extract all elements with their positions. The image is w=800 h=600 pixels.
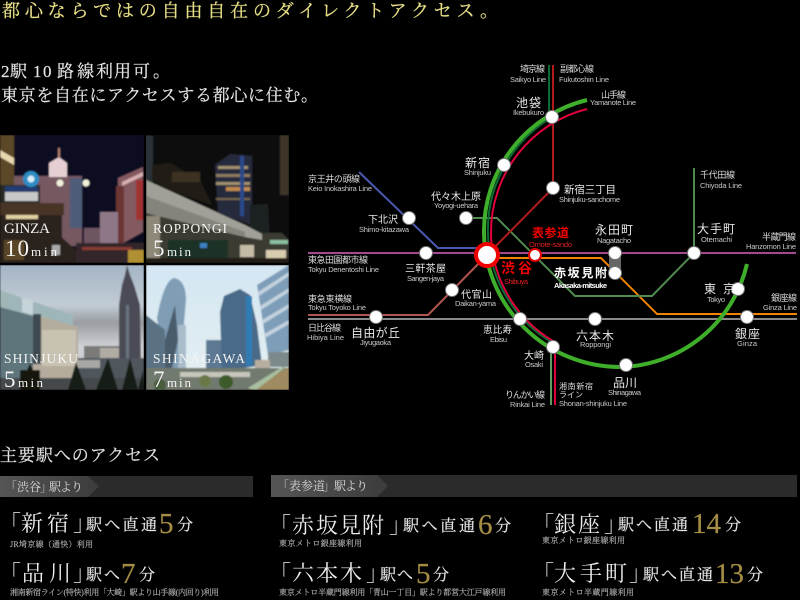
access item: Otemachi bbox=[532, 558, 763, 597]
line: Rinkai lower section bbox=[550, 347, 552, 405]
photo: Shinagawa: min bbox=[167, 375, 192, 390]
label: Sangen-jaya: 三軒茶屋 bbox=[405, 262, 446, 275]
access item: Shinjuku: 「新宿」 bbox=[0, 511, 95, 536]
station: Omote-sando bbox=[529, 249, 541, 261]
label: Ginza Line: 銀座線 bbox=[771, 292, 797, 303]
line: Saikyo bbox=[488, 65, 553, 405]
label: Shonan-shinjuku Line: Shonan-shinjuku Line bbox=[559, 399, 627, 408]
label: Shinjuku: 新宿 bbox=[465, 156, 490, 170]
label: Shinjuku-sanchome: Shinjuku-sanchome bbox=[559, 195, 620, 204]
label: Toyoko Line: Tokyu Toyoko Line bbox=[308, 303, 366, 312]
panel: station photos bbox=[0, 135, 289, 392]
label: Keio Inokashira Line: Keio Inokashira Line bbox=[308, 184, 372, 193]
label: Daikan-yama bbox=[455, 288, 497, 308]
photo: Shinjuku bbox=[0, 265, 144, 392]
map lines bbox=[308, 65, 797, 405]
label: Jiyugaoka bbox=[351, 325, 400, 347]
line: Fukutoshin bbox=[487, 65, 553, 255]
label: Daikan-yama: Daikan-yama bbox=[455, 299, 497, 308]
panel: access from Omote-sando bbox=[269, 475, 797, 597]
access item: Ginza: 「銀座」 bbox=[532, 512, 626, 537]
access item: Shinagawa: 7 bbox=[121, 558, 136, 590]
station: Ginza bbox=[740, 310, 754, 324]
line: Yamanote bbox=[484, 100, 747, 367]
label: Hibiya Line: Hibiya Line bbox=[307, 333, 344, 342]
label: Yamanote Line: Yamanote Line bbox=[590, 98, 636, 107]
label: Ebisu bbox=[483, 324, 512, 344]
access item: Shinagawa bbox=[0, 558, 219, 597]
station: Jiyugaoka bbox=[370, 310, 382, 324]
label: Chiyoda Line: 千代田線 bbox=[700, 169, 735, 180]
label: Yoyogi-uehara: Yoyogi-uehara bbox=[434, 201, 479, 210]
station: Sangen-jaya bbox=[420, 246, 432, 260]
label: Omote-sando: 表参道 bbox=[532, 225, 569, 240]
label: Sangen-jaya: Sangen-jaya bbox=[407, 274, 445, 283]
label: Ikebukuro bbox=[513, 96, 544, 117]
label: Ginza Line bbox=[763, 292, 797, 312]
label: Ebisu: 恵比寿 bbox=[483, 324, 512, 336]
label: Shonan-shinjuku Line: 湘南新宿 bbox=[559, 381, 593, 391]
intro text: 2駅10路線利用可。 bbox=[1, 62, 170, 81]
label: Saikyo Line: 埼京線 bbox=[520, 63, 545, 74]
label: Shinjuku: Shinjuku bbox=[464, 168, 491, 177]
label: Yamanote Line: 山手線 bbox=[601, 89, 626, 100]
access item: Shinjuku: 分 bbox=[177, 516, 193, 534]
access item: Roppongi: 東京メトロ半蔵門線利用「青山一丁目」駅より都営大江戸線利用 bbox=[279, 587, 506, 597]
label: Roppongi: 六本木 bbox=[576, 329, 614, 343]
label: Keio Inokashira Line: 京王井の頭線 bbox=[308, 173, 360, 184]
line: Hanzomon and Denentoshi bbox=[308, 252, 796, 254]
access item: Ginza: 駅へ直通 bbox=[617, 516, 688, 534]
label: Omote-sando bbox=[529, 225, 572, 249]
access item: Shinjuku: 5 bbox=[159, 508, 174, 540]
label: Otemachi: Otemachi bbox=[701, 235, 732, 244]
label: Nagatacho bbox=[595, 223, 633, 245]
label: Sangen-jaya bbox=[405, 262, 446, 283]
access item: Otemachi: 13 bbox=[715, 558, 744, 590]
label: Osaki bbox=[524, 349, 544, 369]
photo: Shinjuku: min bbox=[18, 375, 44, 390]
label: Shinagawa: Shinagawa bbox=[608, 388, 642, 397]
photo: Roppongi: min bbox=[167, 244, 192, 259]
line: Hibiya bbox=[308, 318, 797, 320]
transfer link bbox=[609, 253, 621, 273]
label: Toyoko Line bbox=[308, 293, 366, 312]
photo: Roppongi: 5 bbox=[153, 236, 164, 261]
access item: Shinjuku: JR埼京線（通快）利用 bbox=[10, 539, 93, 549]
label: Yoyogi-uehara: 代々木上原 bbox=[431, 191, 481, 203]
map labels bbox=[307, 63, 797, 409]
label: Chiyoda Line: Chiyoda Line bbox=[700, 181, 742, 190]
label: Shimo-kitazawa bbox=[359, 213, 410, 234]
label: Shonan-shinjuku Line: ライン bbox=[559, 390, 583, 400]
photo: Roppongi bbox=[145, 135, 289, 263]
label: Akasaka-mitsuke: Akasaka-mitsuke bbox=[554, 281, 607, 290]
label: Keio Inokashira Line bbox=[308, 173, 372, 193]
photo: Shinjuku: SHINJUKU bbox=[4, 351, 78, 366]
label: Jiyugaoka: Jiyugaoka bbox=[360, 338, 392, 347]
station: Shimo-kitazawa bbox=[402, 212, 416, 224]
label: Jiyugaoka: 自由が丘 bbox=[351, 325, 400, 340]
label: Ikebukuro: 池袋 bbox=[516, 96, 541, 110]
line: Ginza bbox=[487, 258, 797, 314]
label: Yoyogi-uehara bbox=[431, 191, 481, 210]
access item: Roppongi: 5 bbox=[416, 558, 430, 590]
header bar: Omote-sando bbox=[271, 475, 797, 497]
label: Shibuya bbox=[501, 260, 532, 286]
access item: Akasaka-mitsuke: 駅へ直通 bbox=[402, 517, 475, 535]
label: Tokyo: 東京 bbox=[704, 282, 735, 296]
label: Osaki: 大崎 bbox=[524, 349, 544, 362]
label: Denentoshi Line: Tokyu Denentoshi Line bbox=[308, 265, 379, 274]
label: Daikan-yama: 代官山 bbox=[461, 288, 492, 301]
access item: Shinagawa: 「品川」 bbox=[0, 561, 95, 586]
label: Nagatacho: 永田町 bbox=[595, 223, 633, 237]
access item: Roppongi: 「六本木」 bbox=[269, 561, 388, 586]
label: Omote-sando: Omote-sando bbox=[529, 240, 572, 249]
label: Toyoko Line: 東急東横線 bbox=[308, 293, 352, 304]
access item: Ginza: 14 bbox=[692, 508, 722, 540]
station: Otemachi bbox=[688, 246, 700, 260]
station: Shinjuku-sanchome bbox=[546, 182, 560, 194]
label: Denentoshi Line bbox=[308, 254, 379, 274]
label: Otemachi bbox=[697, 222, 735, 244]
access item: Shinjuku: 駅へ直通 bbox=[85, 516, 157, 534]
station: Daikan-yama bbox=[446, 284, 458, 296]
line: Toyoko bbox=[308, 255, 487, 315]
label: Tokyo: Tokyo bbox=[707, 295, 725, 304]
photo: Ginza: 10 bbox=[5, 236, 29, 261]
label: Nagatacho: Nagatacho bbox=[597, 236, 631, 245]
station: Shinjuku bbox=[498, 158, 510, 172]
label: Yamanote Line bbox=[590, 89, 636, 107]
access item: Shinjuku bbox=[0, 508, 193, 549]
label: Osaki: Osaki bbox=[525, 360, 543, 369]
label: Ginza bbox=[735, 327, 760, 348]
label: Shinjuku bbox=[464, 156, 491, 177]
label: Hanzomon Line: Hanzomon Line bbox=[746, 242, 796, 251]
access item: Otemachi: 分 bbox=[747, 566, 763, 584]
access item: Shinagawa: 湘南新宿ライン(特快)利用「大崎」駅より山手線(内回り)利用 bbox=[10, 587, 219, 597]
section heading: 主要駅へのアクセス bbox=[0, 446, 160, 465]
station: Tokyo bbox=[732, 282, 744, 296]
station: Yoyogi-uehara bbox=[460, 212, 472, 224]
label: Otemachi: 大手町 bbox=[697, 222, 735, 236]
label: Rinkai Line: りんかい線 bbox=[505, 389, 545, 400]
label: Hanzomon Line: 半蔵門線 bbox=[762, 231, 796, 242]
station: Shinagawa bbox=[620, 358, 632, 372]
photo: Shinagawa: 7 bbox=[153, 367, 164, 392]
access item: Akasaka-mitsuke: 「赤坂見附」 bbox=[269, 513, 411, 538]
access item: Roppongi: 駅へ bbox=[379, 566, 413, 584]
photo: Ginza: min bbox=[31, 244, 58, 259]
access item: Otemachi: 東京メトロ半蔵門線利用 bbox=[542, 587, 634, 597]
station: Shibuya bbox=[476, 244, 498, 266]
label: Hibiya Line bbox=[307, 322, 344, 342]
access item: Akasaka-mitsuke: 6 bbox=[478, 509, 492, 541]
line: Shonan-shinjuku bbox=[491, 109, 587, 405]
label: Ikebukuro: Ikebukuro bbox=[513, 108, 544, 117]
label: Hanzomon Line bbox=[746, 231, 796, 251]
label: Fukutoshin Line: Fukutoshin Line bbox=[559, 75, 609, 84]
label: Hibiya Line: 日比谷線 bbox=[308, 322, 341, 333]
label: Ginza: 銀座 bbox=[735, 327, 760, 341]
photo: Shinjuku: 5 bbox=[4, 367, 16, 392]
intro text bbox=[1, 62, 318, 105]
label: Shinagawa: 品川 bbox=[613, 376, 637, 390]
station: Nagatacho bbox=[608, 246, 622, 260]
label: Tokyo bbox=[704, 282, 735, 304]
panel: access from Shibuya bbox=[0, 476, 253, 597]
photo: Shinagawa bbox=[146, 265, 289, 392]
label: Ginza: Ginza bbox=[737, 339, 758, 348]
access item: Shinagawa: 分 bbox=[139, 566, 155, 584]
station: Ikebukuro bbox=[546, 110, 558, 124]
label: Rinkai Line bbox=[505, 389, 545, 409]
label: Rinkai Line: Rinkai Line bbox=[510, 400, 545, 409]
line: Inokashira bbox=[359, 172, 487, 248]
photo: Shinagawa: SHINAGAWA bbox=[153, 351, 245, 366]
access item: Roppongi: 分 bbox=[433, 566, 449, 584]
photo: Ginza bbox=[0, 135, 144, 263]
access item: Ginza: 分 bbox=[725, 516, 741, 534]
station: Osaki bbox=[546, 340, 560, 354]
label: Saikyo Line bbox=[510, 63, 546, 84]
label: Roppongi: Roppongi bbox=[580, 340, 611, 349]
route map bbox=[307, 63, 797, 409]
intro text: 東京を自在にアクセスする都心に住む。 bbox=[1, 86, 318, 105]
label: Shonan-shinjuku Line bbox=[559, 381, 627, 408]
title: 都心ならではの自由自在のダイレクトアクセス。 bbox=[2, 1, 498, 21]
label: Shinjuku-sanchome: 新宿三丁目 bbox=[564, 183, 616, 196]
header bar: Shibuya: 「渋谷」駅より bbox=[5, 479, 83, 494]
label: Shibuya: Shibuya bbox=[504, 277, 529, 286]
label: Ginza Line: Ginza Line bbox=[763, 303, 797, 312]
label: Shibuya: 渋谷 bbox=[501, 260, 532, 276]
label: Shimo-kitazawa: 下北沢 bbox=[368, 213, 398, 226]
label: Akasaka-mitsuke bbox=[554, 266, 607, 290]
label: Ebisu: Ebisu bbox=[490, 335, 507, 344]
header bar: Omote-sando: 「表参道」駅より bbox=[277, 478, 368, 493]
station: Roppongi bbox=[588, 312, 602, 326]
access item: Otemachi: 駅へ直通 bbox=[642, 566, 713, 584]
label: Fukutoshin Line: 副都心線 bbox=[560, 63, 594, 74]
station: Akasaka-mitsuke bbox=[608, 266, 622, 280]
label: Shinagawa bbox=[608, 376, 642, 397]
label: Saikyo Line: Saikyo Line bbox=[510, 75, 546, 84]
access item: Akasaka-mitsuke: 東京メトロ銀座線利用 bbox=[279, 538, 362, 548]
photo: Roppongi: ROPPONGI bbox=[153, 221, 228, 236]
label: Shinjuku-sanchome bbox=[559, 183, 620, 204]
access item: Otemachi: 「大手町」 bbox=[532, 561, 651, 586]
label: Fukutoshin Line bbox=[559, 63, 609, 84]
header bar: Shibuya bbox=[0, 476, 253, 497]
access item: Ginza: 東京メトロ銀座線利用 bbox=[542, 535, 625, 545]
access item: Akasaka-mitsuke bbox=[269, 509, 511, 548]
label: Denentoshi Line: 東急田園都市線 bbox=[308, 254, 368, 265]
access item: Ginza bbox=[532, 508, 741, 545]
access item: Akasaka-mitsuke: 分 bbox=[495, 517, 511, 535]
photo: Ginza: GINZA bbox=[4, 221, 50, 237]
label: Chiyoda Line bbox=[700, 169, 742, 190]
line: Chiyoda bbox=[466, 168, 694, 296]
stations bbox=[370, 110, 754, 372]
label: Shimo-kitazawa: Shimo-kitazawa bbox=[359, 225, 410, 234]
label: Akasaka-mitsuke: 赤坂見附 bbox=[554, 266, 607, 280]
station: Ebisu bbox=[514, 312, 526, 326]
access item: Roppongi bbox=[269, 558, 506, 597]
access item: Shinagawa: 駅へ bbox=[85, 566, 120, 584]
